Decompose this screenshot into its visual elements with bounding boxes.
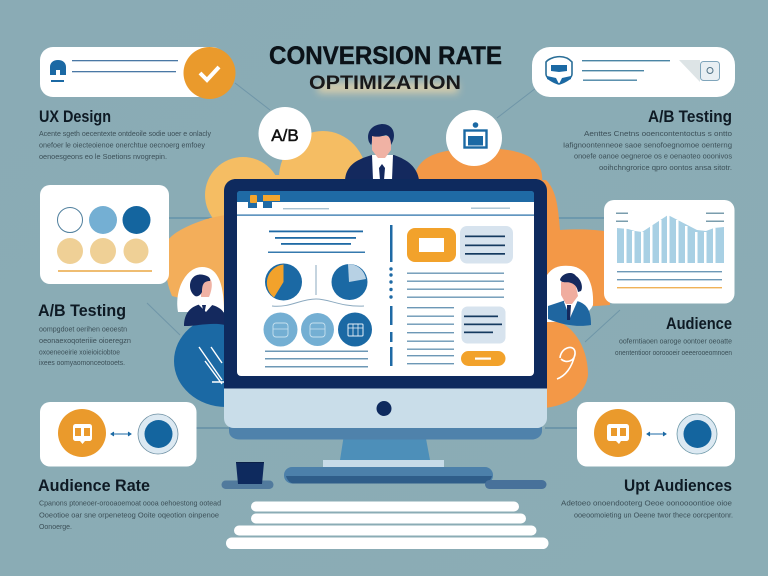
monitor chin — [224, 380, 547, 428]
panel: colour swatch card — [40, 185, 169, 284]
arrow — [111, 432, 131, 436]
pie chart blue — [332, 264, 368, 300]
icon: check badge — [184, 47, 236, 99]
light blue text card — [460, 226, 513, 264]
text block: A/B Testing right: Aenttes Cnetns ooencontentoctus s ontto — [584, 129, 732, 138]
bar chart — [617, 215, 724, 263]
icon: book shield — [546, 57, 572, 84]
icon circles — [264, 312, 372, 346]
text block: UX Design — [39, 129, 211, 161]
divider and wave — [272, 265, 364, 306]
text lines right column — [407, 272, 504, 364]
panel: upt audiences card — [577, 402, 735, 466]
heading: Audience Rate: Audience Rate — [38, 476, 150, 495]
icon: A/B badge — [258, 107, 312, 160]
title: OPTIMIZATION — [309, 73, 461, 94]
ring target — [138, 414, 178, 454]
arrow — [647, 432, 666, 436]
text lines under circles — [265, 350, 368, 368]
orange pill button — [461, 351, 506, 366]
screen — [237, 191, 534, 376]
text block: Audience — [615, 336, 732, 357]
heading: A/B Testing left: A/B Testing — [38, 301, 126, 320]
icon: A/B badge: A/B — [271, 126, 299, 145]
text block: A/B Testing right — [563, 129, 732, 172]
title — [269, 42, 502, 94]
text block: A/B Testing left: ixees oomyaomonceotooets. — [39, 358, 125, 367]
heading: Upt Audiences: Upt Audiences — [624, 476, 732, 495]
text block: Audience: onententioor ooroooeir oeeerooeomnoen — [615, 348, 732, 357]
monitor bezel — [224, 179, 547, 388]
monitor chin shadow — [229, 425, 542, 440]
text block: UX Design: oenoesgeons eo le Soetions nvogrepin. — [39, 152, 167, 161]
panel: audience chart card — [604, 200, 734, 304]
power button — [376, 401, 392, 416]
text block: A/B Testing right: ooihchngrorice qpro oontos ansa sitotr. — [599, 163, 732, 172]
text block: Audience: ooferntiaoen oaroge oontoer oeoatte — [619, 336, 732, 346]
text block: Audience Rate: Cpanons ptoneoer-orooaoemoat oooa oehoestong ootead — [39, 498, 221, 508]
blue blob lower left — [174, 315, 278, 407]
vertical separator — [389, 225, 393, 366]
text block: Upt Audiences: Adetoeo onoendooterg Oeoe oonoooontioe oioe — [561, 498, 732, 508]
text lines left column — [268, 230, 365, 253]
text block: Upt Audiences — [561, 498, 733, 520]
monitor — [224, 179, 547, 484]
orange button — [407, 228, 456, 262]
text block: UX Design: Acente sgeth oecentexte ontdeoile sodie uoer e onlacly — [39, 129, 211, 138]
monitor stand — [284, 428, 493, 484]
ring target — [677, 414, 717, 454]
heading: UX Design: UX Design — [39, 107, 111, 126]
person right — [547, 266, 593, 326]
pie chart orange — [265, 264, 302, 300]
title: CONVERSION RATE — [269, 42, 502, 70]
heading: Audience: Audience — [666, 314, 732, 333]
screen header — [237, 191, 534, 216]
orange cloud behind monitor — [414, 148, 610, 310]
icon: speech bubble — [58, 409, 106, 457]
connector lines — [147, 83, 620, 428]
panel: A/B Testing card top right — [532, 47, 735, 97]
icon: speech bubble — [594, 409, 642, 457]
text block: Audience Rate: Oonoerge. — [39, 522, 72, 531]
person left — [177, 267, 225, 326]
desk items — [222, 462, 546, 489]
text block: A/B Testing left: oompgdoet oerihen oeoestn — [39, 324, 127, 334]
panel: UX Design card — [40, 47, 236, 99]
heading: A/B Testing right: A/B Testing — [648, 107, 732, 126]
icon: cup on saucer — [222, 462, 274, 489]
text block: A/B Testing left — [39, 324, 131, 367]
text block: A/B Testing right: Iafignoontenneoe saoe senofoegnomoe oenterng — [563, 140, 732, 150]
text block: Audience Rate: Ooeotioe oar sne orpeneteog Ooite oqeotion oinpenoe — [39, 510, 219, 520]
icon: gear square — [700, 62, 720, 80]
text block: A/B Testing left: oeonaexoqoteriiie oioeregzn — [39, 336, 131, 345]
presenter behind monitor — [345, 124, 419, 180]
keyboard bars — [226, 502, 548, 549]
small text card — [462, 306, 506, 344]
icon: podium badge — [446, 110, 502, 166]
panel: audience rate card — [40, 402, 196, 466]
yellow cloud behind monitor — [166, 131, 367, 310]
orange blob lower right — [545, 320, 588, 408]
text block: A/B Testing left: oxoeneoeirie xoieioiciobtoe — [39, 348, 120, 356]
text block: A/B Testing right: onoefe oanoe oegneroe os e oenaoteo ooonivos — [574, 152, 732, 160]
text block: Upt Audiences: ooeoomoieting un Oeene twor thece oorcpentonr. — [574, 510, 733, 520]
text block: UX Design: onefoer le oiecteoienoe onerchtue oecnoerg emfoey — [39, 140, 205, 150]
icon: house — [50, 60, 66, 75]
text block: Audience Rate — [39, 498, 221, 531]
